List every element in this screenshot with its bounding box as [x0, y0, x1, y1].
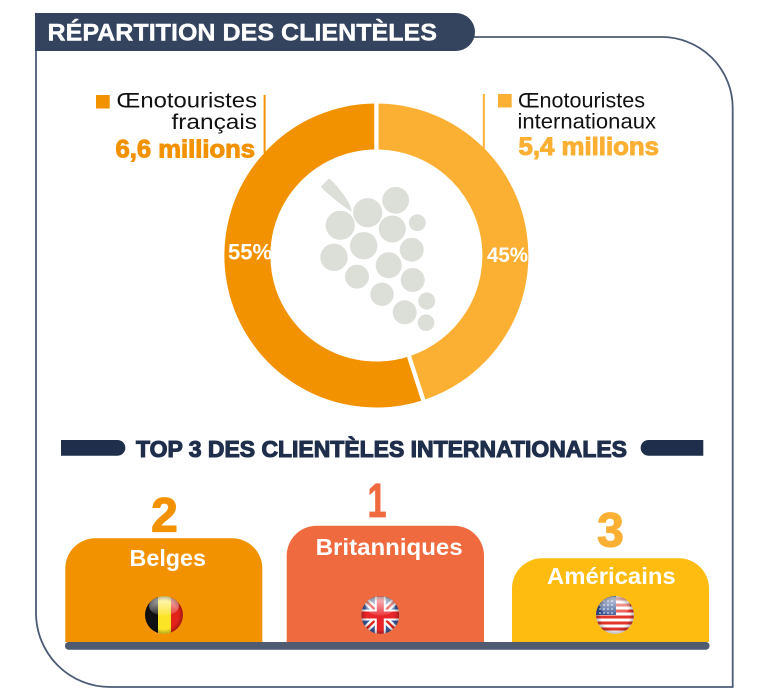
section heading: top 3: TOP 3 DES CLIENTÈLES INTERNATIONALES [136, 435, 627, 462]
icon: Belgian flag [145, 596, 184, 634]
podium block [287, 526, 484, 642]
legend: French wine tourists: français [172, 111, 257, 134]
icon: grape bunch [320, 178, 435, 331]
podium block [512, 558, 709, 642]
title banner [35, 13, 475, 51]
legend: international wine tourists: Œnotouristes [518, 89, 645, 112]
title banner: RÉPARTITION DES CLIENTÈLES [48, 19, 437, 47]
legend: international wine tourists [483, 89, 659, 161]
legend: French wine tourists [96, 89, 266, 164]
segment: international 45% [376, 126, 505, 378]
icon: UK flag [361, 596, 400, 634]
podium base bar [65, 642, 710, 650]
segment: French 55% [247, 126, 416, 384]
legend: French wine tourists: Œnotouristes [116, 89, 257, 112]
podium: rank 1 British [287, 475, 484, 642]
label 55%: 55% [228, 240, 272, 264]
legend: international wine tourists: internationaux [518, 111, 657, 134]
number 3: 3 [597, 504, 624, 558]
legend: international wine tourists: 5,4 millions [518, 133, 659, 161]
label Belges: Belges [130, 545, 206, 571]
label Britanniques: Britanniques [316, 534, 463, 560]
number 2: 2 [151, 490, 178, 542]
podium block [65, 538, 262, 642]
podium: rank 2 Belgians [65, 490, 262, 642]
podium: rank 3 Americans [512, 504, 709, 642]
legend: French wine tourists: 6,6 millions [116, 136, 255, 164]
icon: US flag [596, 596, 634, 634]
label Américains: Américains [547, 563, 676, 589]
label 45%: 45% [487, 244, 528, 267]
donut chart [228, 100, 528, 404]
number 1: 1 [368, 475, 386, 528]
